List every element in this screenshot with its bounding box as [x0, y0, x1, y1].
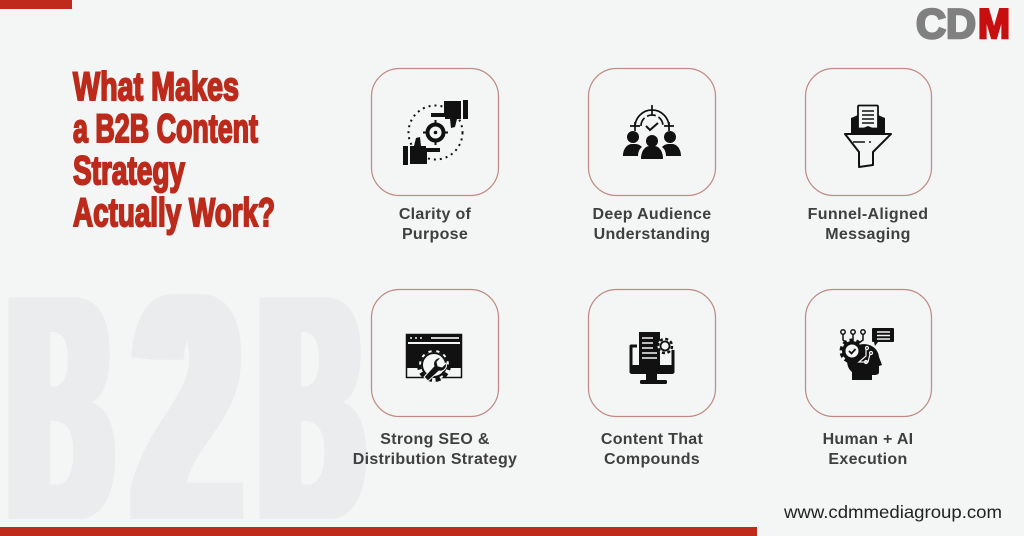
panel: funnel-aligned messaging	[806, 68, 932, 243]
bottom accent bar	[0, 527, 757, 536]
icon: audience with target arc	[623, 105, 681, 159]
label: Content That	[601, 431, 703, 448]
panel: strong SEO and distribution strategy	[353, 290, 517, 468]
label: Understanding	[594, 226, 710, 243]
title: Actually Work?	[73, 191, 275, 235]
label: Human + AI	[823, 431, 913, 448]
watermark: B2B	[8, 288, 366, 528]
label: Execution	[828, 451, 908, 468]
title	[73, 65, 275, 235]
title: What Makes	[73, 65, 239, 109]
website url: www.cdmmediagroup.com	[783, 502, 1002, 522]
label: Strong SEO &	[380, 431, 490, 448]
title: a B2B Content	[73, 107, 258, 151]
label: Purpose	[402, 226, 468, 243]
panel: deep audience understanding	[588, 68, 716, 243]
top accent bar	[0, 0, 72, 9]
label: Compounds	[604, 451, 700, 468]
logo: CDM: M	[978, 0, 1010, 47]
title: Strategy	[73, 149, 186, 193]
label: Funnel-Aligned	[808, 206, 928, 223]
icon: hands framing a target	[403, 100, 468, 165]
icon: monitor with document and gear	[630, 332, 674, 384]
label: Clarity of	[399, 206, 472, 223]
panel: human + AI execution	[806, 290, 932, 468]
icon: envelope in funnel	[845, 106, 891, 167]
label: Deep Audience	[593, 206, 711, 223]
panel: content that compounds	[588, 290, 716, 468]
panel: clarity of purpose	[372, 68, 498, 243]
icon: browser with gear and wrench	[406, 334, 462, 381]
logo: CDM: CD	[916, 0, 976, 47]
label: Distribution Strategy	[353, 451, 517, 468]
logo: CDM	[916, 0, 1010, 47]
label: Messaging	[825, 226, 911, 243]
icon: head with gear and speech bubble	[841, 328, 894, 380]
